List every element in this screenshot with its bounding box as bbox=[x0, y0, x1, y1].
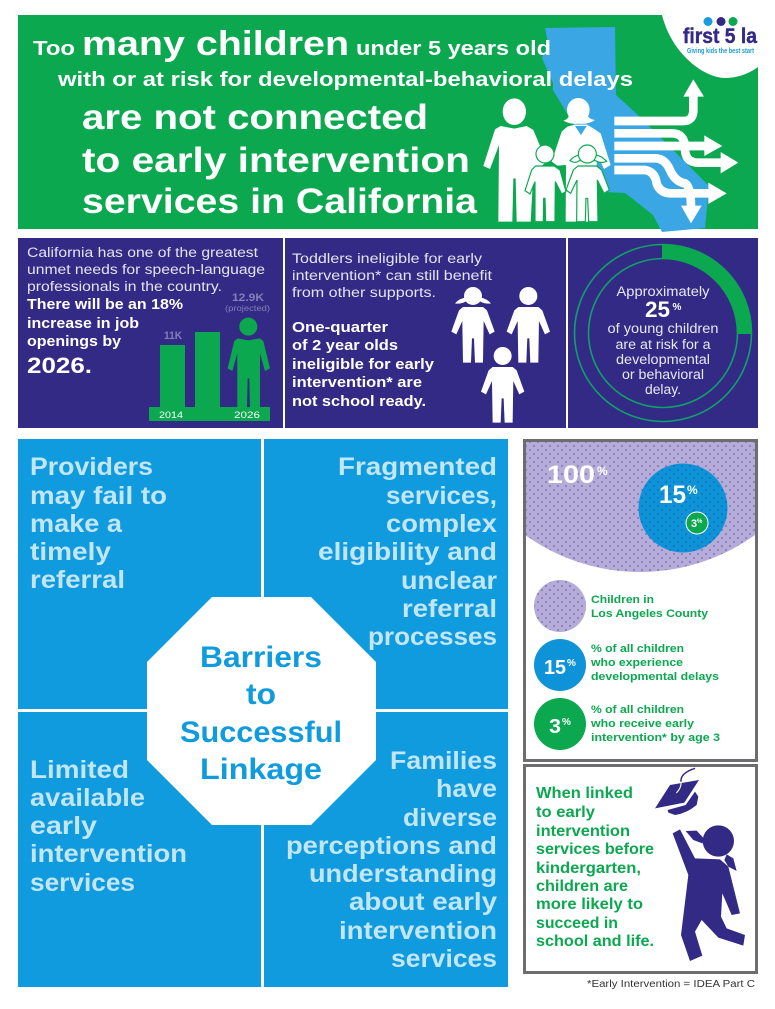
legend: children in LA county: Children in bbox=[591, 594, 654, 606]
text: 18% increase bbox=[27, 297, 183, 378]
logo: first 5 la bbox=[662, 15, 758, 78]
text: 18% increase: There will be an 18% bbox=[27, 297, 183, 313]
chart: nested circles bbox=[526, 442, 755, 572]
text: other supports: Toddlers ineligible for early bbox=[292, 251, 482, 266]
octagon: barriers to successful linkage bbox=[147, 597, 376, 825]
bar chart: job openings bbox=[149, 292, 270, 421]
text: limited services bbox=[30, 756, 187, 897]
legend: 3 percent bbox=[534, 698, 720, 750]
panel: Los Angeles County proportions bbox=[523, 439, 758, 762]
legend: 15 percent: developmental delays bbox=[591, 671, 719, 683]
text: fragmented services: Fragmented bbox=[338, 453, 497, 481]
text: providers: may fail to bbox=[30, 482, 167, 510]
icon: graduation cap bbox=[655, 768, 699, 815]
text: fragmented services bbox=[318, 453, 497, 651]
text: limited services: available bbox=[30, 784, 145, 812]
text: fragmented services: complex bbox=[386, 510, 497, 538]
text: providers: make a bbox=[30, 510, 123, 538]
text: when linked: succeed in bbox=[536, 915, 618, 932]
text: providers: timely bbox=[30, 538, 111, 566]
text: when linked bbox=[536, 785, 654, 950]
text: 25 percent at risk: of young children bbox=[608, 321, 718, 336]
text: when linked: services before bbox=[536, 841, 654, 858]
text: 18% increase: increase in job bbox=[27, 316, 139, 332]
title text: are not connected bbox=[82, 98, 428, 137]
title text: Too bbox=[33, 38, 75, 60]
text: limited services: intervention bbox=[30, 840, 187, 868]
text: family perceptions bbox=[286, 747, 497, 973]
bar chart: job openings: 11K bbox=[164, 330, 182, 342]
legend: 3 percent: % of all children bbox=[591, 704, 684, 716]
chart: nested circles: 15 bbox=[659, 481, 686, 509]
title text: under 5 years old bbox=[356, 38, 551, 60]
legend: children in LA county bbox=[534, 580, 709, 632]
text: one-quarter: of 2 year olds bbox=[292, 338, 398, 354]
icon: jumping child bbox=[673, 825, 745, 961]
text: other supports bbox=[292, 251, 492, 300]
text: when linked: children are bbox=[536, 878, 628, 895]
octagon: barriers to successful linkage: Barriers bbox=[200, 641, 322, 674]
text: family perceptions: services bbox=[391, 945, 497, 973]
panel: school success bbox=[524, 766, 756, 972]
title text: with or at risk for developmental-behavioral delays bbox=[57, 69, 633, 91]
text: unmet needs: unmet needs for speech-language bbox=[27, 262, 265, 277]
text: providers: referral bbox=[30, 566, 125, 594]
text: one-quarter: ineligible for early bbox=[292, 357, 434, 373]
legend: 15 percent bbox=[534, 639, 719, 691]
text: fragmented services: services, bbox=[386, 482, 497, 510]
chart: nested circles: 3 bbox=[691, 518, 697, 530]
bar chart: job openings: 12.9K bbox=[232, 292, 264, 304]
text: family perceptions: diverse bbox=[403, 804, 497, 832]
chart: nested circles: 100 bbox=[547, 461, 595, 489]
chart: nested circles: % bbox=[687, 483, 698, 497]
text: providers bbox=[30, 453, 167, 594]
legend: 15 percent: % bbox=[567, 658, 576, 669]
text: family perceptions: Families bbox=[390, 747, 497, 775]
header banner bbox=[18, 15, 758, 232]
text: when linked: school and life. bbox=[536, 933, 654, 950]
text: other supports: intervention* can still benefit bbox=[292, 268, 492, 283]
text: family perceptions: intervention bbox=[339, 917, 497, 945]
legend: 15 percent: who experience bbox=[590, 657, 683, 669]
text: 25 percent at risk bbox=[608, 284, 718, 397]
legend: 15 percent: % of all children bbox=[591, 643, 684, 655]
text: 18% increase: 2026. bbox=[27, 353, 92, 378]
chart: nested circles: % bbox=[697, 519, 703, 525]
icon: three children bbox=[451, 287, 550, 423]
legend: 3 percent: who receive early bbox=[590, 718, 695, 730]
text: providers: Providers bbox=[30, 453, 153, 481]
panel: barriers bbox=[18, 439, 508, 987]
bar chart: job openings: 2014 bbox=[159, 410, 183, 421]
text: fragmented services: unclear bbox=[401, 567, 497, 595]
icon: family bbox=[483, 98, 611, 222]
text: one-quarter: One-quarter bbox=[292, 320, 388, 336]
text: limited services: early bbox=[30, 812, 97, 840]
octagon: barriers to successful linkage: to bbox=[246, 678, 276, 711]
text: fragmented services: referral bbox=[402, 595, 497, 623]
panel: toddlers bbox=[285, 238, 566, 428]
text: family perceptions: about early bbox=[349, 888, 497, 916]
text: when linked: When linked bbox=[536, 785, 633, 802]
text: one-quarter: intervention* are bbox=[292, 375, 422, 391]
text: 25 percent at risk: Approximately bbox=[616, 284, 710, 299]
text: limited services: services bbox=[30, 869, 135, 897]
text: family perceptions: perceptions and bbox=[286, 832, 497, 860]
legend: 3 percent: % bbox=[562, 717, 571, 728]
title text: to early intervention bbox=[82, 141, 470, 180]
text: limited services: Limited bbox=[30, 756, 129, 784]
text: family perceptions: have bbox=[436, 775, 497, 803]
bar chart: job openings: 2026 bbox=[234, 410, 260, 421]
text: family perceptions: understanding bbox=[309, 860, 497, 888]
text: when linked: more likely to bbox=[536, 896, 643, 913]
text: one-quarter bbox=[292, 320, 434, 410]
text: 25 percent at risk: delay. bbox=[645, 382, 681, 397]
text: when linked: intervention bbox=[536, 823, 630, 840]
text: fragmented services: processes bbox=[368, 623, 497, 651]
icon: California map bbox=[542, 27, 708, 232]
bar chart: job openings: (projected) bbox=[225, 304, 270, 313]
text: 25 percent at risk: % bbox=[673, 302, 682, 313]
text: other supports: from other supports. bbox=[292, 285, 436, 300]
legend: 3 percent: intervention* by age 3 bbox=[591, 732, 720, 744]
text: unmet needs: professionals in the country. bbox=[27, 279, 222, 294]
text: one-quarter: not school ready. bbox=[292, 394, 426, 410]
logo: first 5 la: Giving kids the best start bbox=[687, 48, 755, 55]
text: fragmented services: eligibility and bbox=[318, 538, 497, 566]
text: 25 percent at risk: or behavioral bbox=[622, 367, 704, 382]
octagon: barriers to successful linkage: Successful bbox=[180, 716, 342, 749]
title text bbox=[33, 25, 633, 221]
text: unmet needs: California has one of the greatest bbox=[27, 245, 258, 260]
footnote: *Early Intervention = IDEA Part C bbox=[587, 979, 755, 990]
legend: children in LA county: Los Angeles County bbox=[591, 608, 709, 620]
legend: 15 percent: 15 bbox=[544, 657, 566, 679]
panel: 25 percent ring bbox=[568, 238, 758, 428]
text: when linked: kindergarten, bbox=[536, 860, 641, 877]
title text: services in California bbox=[82, 182, 478, 221]
octagon: barriers to successful linkage: Linkage bbox=[200, 753, 322, 786]
icon: five flow arrows bbox=[614, 79, 738, 223]
legend: 3 percent: 3 bbox=[549, 716, 561, 738]
chart: nested circles: % bbox=[597, 464, 608, 478]
title text: many children bbox=[82, 25, 349, 63]
logo: first 5 la: first 5 la bbox=[683, 25, 757, 48]
text: 25 percent at risk: 25 bbox=[645, 297, 670, 322]
text: 18% increase: openings by bbox=[27, 334, 121, 350]
text: 25 percent at risk: are at risk for a bbox=[616, 337, 711, 352]
text: unmet needs bbox=[27, 245, 265, 294]
chart: ring bbox=[574, 244, 752, 422]
icon: green person bar bbox=[228, 318, 270, 408]
text: 25 percent at risk: developmental bbox=[616, 352, 710, 367]
panel: job openings bbox=[18, 238, 283, 428]
text: when linked: to early bbox=[536, 804, 595, 821]
